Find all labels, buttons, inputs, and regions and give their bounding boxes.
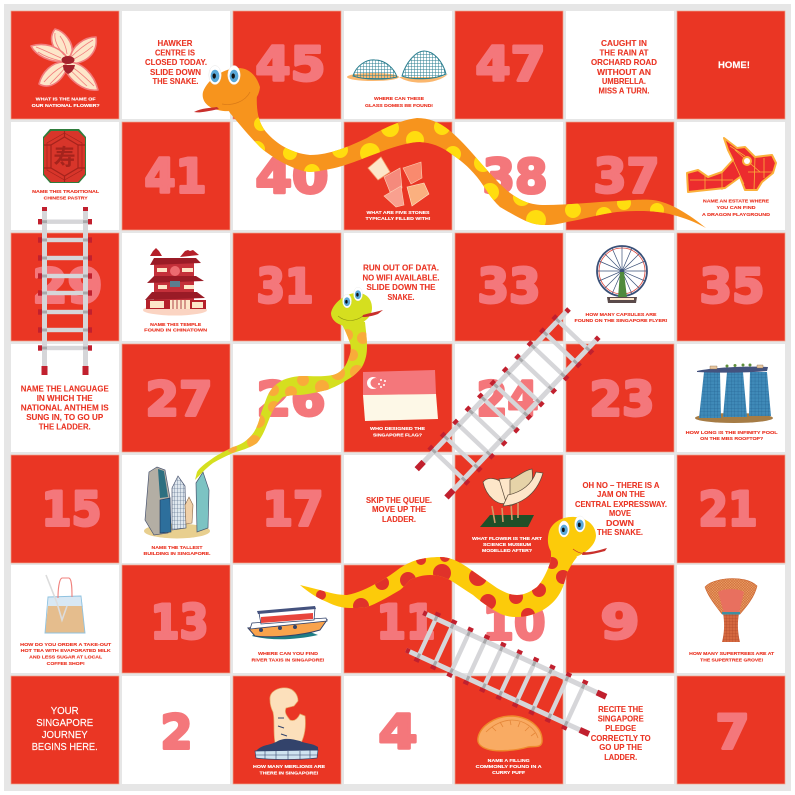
cell: traditional pastry question: [11, 122, 119, 230]
cell: number 13: [122, 565, 230, 673]
ladder: diagonal centre: [412, 305, 603, 502]
cell: number 7: [677, 676, 785, 784]
caption: [252, 651, 325, 664]
cell: number 38: 38: [482, 150, 548, 205]
caption: THERE IN SINGAPORE!: [260, 771, 319, 777]
icon: temple: [143, 248, 207, 316]
cell: number 17: [233, 455, 341, 563]
cell: number 29: [11, 233, 119, 341]
caption: [574, 312, 668, 324]
caption: WHO DESIGNED THE: [370, 426, 426, 432]
cell: number 23: 23: [590, 372, 654, 428]
cell: number 10: 10: [482, 596, 546, 652]
caption: [702, 199, 771, 218]
caption: [370, 426, 426, 439]
cell: number 26: 26: [256, 372, 326, 428]
caption: AND LESS SUGAR AT LOCAL: [29, 655, 102, 661]
cell: recite the pledge instruction: PLEDGE: [605, 723, 637, 733]
cell: central expressway jam instruction: MOVE: [609, 508, 631, 518]
cell: central expressway jam instruction: JAM ON THE: [597, 489, 645, 499]
cell: run out of data instruction: NO WIFI AVAILABLE.: [362, 273, 440, 283]
cell: number 26: [233, 344, 341, 452]
cell: river taxi question: [233, 565, 341, 673]
caption: FOUND ON THE SINGAPORE FLYER!: [574, 318, 668, 324]
caption: HOW LONG IS THE INFINITY POOL: [686, 430, 778, 436]
cell: number 21: 21: [698, 482, 758, 538]
caption: SCIENCE MUSEUM: [483, 542, 531, 548]
cell: skip the queue instruction: MOVE UP THE: [372, 504, 426, 514]
cell: number 31: 31: [256, 260, 314, 314]
cell: caught in the rain instruction: CAUGHT IN: [601, 38, 647, 48]
cell: caught in the rain instruction: WITHOUT AN: [597, 67, 651, 77]
caption: [32, 189, 99, 202]
cell: hawker centre snake instruction: CENTRE IS: [155, 48, 195, 58]
cell: number 40: 40: [256, 150, 328, 205]
cell: number 47: 47: [476, 38, 546, 92]
cell: number 9: [566, 565, 674, 673]
caption: HOW MANY MERLIONS ARE: [253, 764, 326, 770]
cell: number 2: 2: [160, 706, 192, 760]
cell: recite the pledge instruction: LADDER.: [604, 752, 637, 762]
cell: number 35: [677, 233, 785, 341]
cell: number 7: 7: [716, 706, 750, 760]
cell: central expressway jam instruction: THE SNAKE.: [597, 527, 643, 537]
cell: number 23: [566, 344, 674, 452]
caption: WHAT IS THE NAME OF: [36, 97, 96, 103]
cell: run out of data instruction: [344, 233, 452, 341]
ladder: vertical from language square: [38, 207, 92, 375]
caption: OUR NATIONAL FLOWER?: [32, 103, 100, 109]
cell: national anthem language question: NAME THE LANGUAGE: [21, 383, 109, 393]
cell: hawker centre snake instruction: [122, 11, 230, 119]
cell: tallest building question: [122, 455, 230, 563]
caption: HOW MANY CAPSULES ARE: [586, 312, 657, 318]
cell: central expressway jam instruction: DOWN: [606, 518, 634, 528]
cell: number 31: [233, 233, 341, 341]
icon: dragon estate map: [687, 138, 776, 192]
cell: number 11: 11: [376, 596, 436, 650]
caption: HOW DO YOU ORDER A TAKE-OUT: [20, 642, 111, 648]
cell: recite the pledge instruction: GO UP THE: [599, 742, 643, 752]
cell: hawker centre snake instruction: CLOSED TODAY.: [145, 57, 207, 67]
cell: number 33: [455, 233, 563, 341]
cell: number 2: [122, 676, 230, 784]
caption: ON THE MBS ROOFTOP?: [700, 436, 763, 442]
cell: hawker centre snake instruction: THE SNAKE.: [152, 76, 198, 86]
cell: number 13: 13: [150, 596, 208, 650]
cell: national anthem language question: NATIONAL ANTHEM IS: [21, 402, 109, 412]
caption: WHERE CAN THESE: [374, 96, 425, 102]
cell: number 47: [455, 11, 563, 119]
caption: NAME A FILLING: [488, 758, 530, 764]
cell: national anthem language question: THE LADDER.: [39, 421, 91, 431]
caption: YOU CAN FIND: [716, 205, 756, 211]
caption: [144, 322, 208, 334]
cell: start: JOURNEY: [42, 730, 88, 741]
cell: number 38: [455, 122, 563, 230]
caption: NAME THE TALLEST: [152, 545, 203, 551]
caption: WHERE CAN YOU FIND: [258, 651, 319, 657]
cell: caught in the rain instruction: ORCHARD ROAD: [591, 57, 657, 67]
cell: start: YOUR: [51, 706, 79, 717]
cell: recite the pledge instruction: CORRECTLY TO: [591, 733, 651, 743]
cell: central expressway jam instruction: OH NO – THERE IS A: [582, 480, 660, 490]
icon: curry puff: [478, 716, 542, 751]
caption: [253, 764, 326, 777]
caption: SINGAPORE FLAG?: [373, 433, 422, 439]
cell: number 37: 37: [594, 150, 660, 204]
cell: number 15: 15: [42, 482, 102, 538]
cell: number 21: [677, 455, 785, 563]
cell: Chinatown temple question: [122, 233, 230, 341]
cell: number 27: [122, 344, 230, 452]
cell: national anthem language question: SUNG IN, TO GO UP: [26, 412, 104, 422]
cell: curry puff question: [455, 676, 563, 784]
cell: recite the pledge instruction: RECITE THE: [598, 704, 644, 714]
cell: national anthem language question: [11, 344, 119, 452]
cell: number 10: [455, 565, 563, 673]
icon: ArtScience Museum: [480, 469, 543, 527]
cell: skip the queue instruction: [344, 455, 452, 563]
cell: run out of data instruction: SLIDE DOWN THE: [366, 282, 436, 292]
snake: orange: [194, 66, 706, 230]
cell: glass domes question: [344, 11, 452, 119]
cell: skip the queue instruction: SKIP THE QUEUE.: [366, 495, 432, 505]
snake: lime green: [195, 287, 383, 480]
icon: glass domes: [347, 51, 448, 83]
caption: NAME THIS TRADITIONAL: [32, 189, 99, 195]
cell: takeaway tea question: [11, 565, 119, 673]
cell: national anthem language question: IN WHICH THE: [37, 393, 93, 403]
cell: start: [11, 676, 119, 784]
caption: RIVER TAXIS IN SINGAPORE!: [252, 658, 325, 664]
cell: recite the pledge instruction: SINGAPORE: [598, 714, 644, 724]
caption: [365, 96, 433, 109]
cell: number 4: [344, 676, 452, 784]
caption: HOT TEA WITH EVAPORATED MILK: [21, 648, 111, 654]
icon: tea bag with straw: [45, 575, 85, 633]
caption: COMMONLY FOUND IN A: [476, 764, 542, 770]
caption: HOW MANY SUPERTREES ARE AT: [689, 651, 774, 657]
cell: skip the queue instruction: LADDER.: [382, 514, 416, 524]
cell: number 41: 41: [144, 150, 206, 204]
cell: number 24: [455, 344, 563, 452]
cell: ArtScience Museum question: [455, 455, 563, 563]
cell: caught in the rain instruction: MISS A TURN.: [598, 86, 650, 96]
caption: COFFEE SHOP!: [47, 661, 85, 667]
cell: national flower question: [11, 11, 119, 119]
cell: dragon playground question: [677, 122, 785, 230]
cell: supertree question: [677, 565, 785, 673]
caption: NAME THIS TEMPLE: [150, 322, 202, 328]
cell: caught in the rain instruction: UMBRELLA.: [602, 76, 646, 86]
caption: MODELLED AFTER?: [482, 548, 532, 554]
caption: CHINESE PASTRY: [44, 196, 89, 202]
caption: A DRAGON PLAYGROUND: [702, 212, 771, 218]
icon: Marina Bay Sands: [695, 364, 773, 423]
caption: [472, 536, 542, 554]
caption: [686, 430, 778, 442]
caption: [366, 210, 431, 222]
caption: [689, 651, 774, 664]
ladder: bottom, from recite square: [403, 607, 609, 740]
caption: [32, 97, 100, 109]
cell: number 45: [233, 11, 341, 119]
cell: central expressway jam instruction: CENTRAL EXPRESSWAY.: [575, 499, 667, 509]
cell: Singapore flag question: [344, 344, 452, 452]
cell: number 41: [122, 122, 230, 230]
cell: number 15: [11, 455, 119, 563]
cell: number 35: 35: [700, 260, 764, 314]
cell: start: SINGAPORE: [36, 718, 94, 729]
cell: number 45: 45: [256, 38, 326, 92]
cell: number 11: [344, 565, 452, 673]
caption: CURRY PUFF: [492, 770, 525, 776]
cell: five stones question: [344, 122, 452, 230]
caption: NAME AN ESTATE WHERE: [703, 199, 770, 205]
cell: home: HOME!: [718, 60, 750, 71]
icon: tall buildings: [144, 467, 210, 538]
cell: Marina Bay Sands question: [677, 344, 785, 452]
cell: Singapore Flyer question: [566, 233, 674, 341]
cell: caught in the rain instruction: THE RAIN AT: [600, 48, 649, 58]
cell: number 29: 29: [32, 260, 102, 314]
icon: river taxi boat: [248, 606, 327, 639]
cell: number 33: 33: [478, 260, 540, 314]
caption: BUILDING IN SINGAPORE.: [144, 551, 210, 557]
caption: [476, 758, 542, 776]
caption: GLASS DOMES BE FOUND!: [365, 103, 433, 109]
cell: run out of data instruction: SNAKE.: [388, 292, 414, 302]
cell: hawker centre snake instruction: SLIDE DOWN: [150, 67, 201, 77]
cell: number 24: 24: [476, 372, 538, 428]
caption: [20, 642, 111, 667]
cell: home: [677, 11, 785, 119]
cell: number 4: 4: [378, 706, 418, 760]
cell: number 37: [566, 122, 674, 230]
caption: WHAT ARE FIVE STONES: [366, 210, 430, 216]
icon: five stones: [368, 157, 429, 207]
cell: number 17: 17: [262, 482, 324, 538]
caption: WHAT FLOWER IS THE ART: [472, 536, 542, 542]
icon: ang ku kueh: 寿: [53, 145, 76, 170]
caption: THE SUPERTREE GROVE!: [700, 658, 764, 664]
icon: Merlion: [255, 688, 318, 760]
icon: Singapore flag: [363, 370, 438, 421]
caption: FOUND IN CHINATOWN: [144, 328, 208, 334]
cell: start: BEGINS HERE.: [32, 742, 98, 753]
icon: orchid flower: [31, 29, 98, 90]
caption: TYPICALLY FILLED WITH!: [366, 216, 431, 222]
snake: yellow: [300, 516, 607, 622]
cell: number 27: 27: [146, 372, 212, 428]
icon: Singapore Flyer wheel: [597, 246, 647, 303]
cell: hawker centre snake instruction: HAWKER: [158, 38, 192, 48]
cell: number 9: 9: [600, 596, 640, 650]
cell: number 40: [233, 122, 341, 230]
cell: recite the pledge instruction: [566, 676, 674, 784]
cell: central expressway jam instruction: [566, 455, 674, 563]
cell: caught in the rain instruction: [566, 11, 674, 119]
cell: run out of data instruction: RUN OUT OF DATA.: [363, 263, 439, 273]
icon: supertree: [705, 579, 757, 642]
caption: [144, 545, 210, 557]
cell: Merlion question: [233, 676, 341, 784]
